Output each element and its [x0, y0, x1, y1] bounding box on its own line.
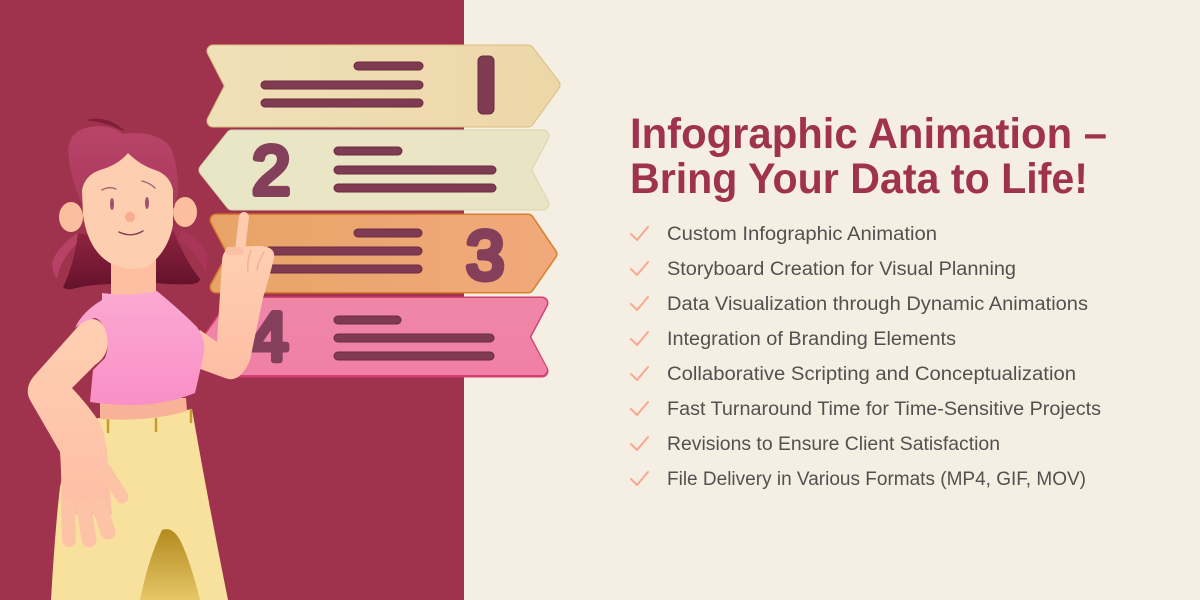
right arm and pointing hand [192, 217, 274, 379]
hair flick [88, 119, 124, 131]
checklist [631, 224, 1101, 490]
heading [630, 110, 1107, 203]
character: woman pointing [28, 119, 274, 600]
heading: Bring Your Data to Life! [630, 155, 1088, 203]
back hair [52, 230, 207, 289]
item 6: Fast Turnaround Time for Time-Sensitive Projects [667, 399, 1101, 420]
item 1: Custom Infographic Animation [667, 224, 937, 245]
ribbon 2: 2 [252, 132, 290, 209]
neck [111, 255, 156, 296]
item 7: Revisions to Ensure Client Satisfaction [667, 434, 1000, 455]
ears [59, 197, 197, 232]
background: maroon panel [0, 0, 464, 600]
ribbon 2 [205, 132, 543, 209]
item 3: Data Visualization through Dynamic Animations [667, 294, 1088, 315]
legs: yellow trousers [51, 409, 228, 600]
ribbon 1 [213, 51, 554, 121]
front hair [68, 126, 178, 208]
ribbon 3: 3 [466, 217, 504, 294]
waist [100, 398, 187, 420]
ribbon 4: 4 [250, 298, 288, 375]
item 2: Storyboard Creation for Visual Planning [667, 259, 1016, 280]
background: cream panel [464, 0, 1200, 600]
heading: Infographic Animation – [630, 110, 1107, 158]
face [82, 153, 173, 269]
item 5: Collaborative Scripting and Conceptualization [667, 364, 1076, 385]
pink crop top [75, 291, 204, 405]
ribbon 3 [216, 217, 551, 294]
item 8: File Delivery in Various Formats (MP4, GIF, MOV) [667, 469, 1086, 490]
left arm and hand on hip [28, 319, 122, 540]
item 4: Integration of Branding Elements [667, 329, 956, 350]
ribbon stack [205, 51, 554, 375]
ribbon 4 [210, 298, 542, 375]
